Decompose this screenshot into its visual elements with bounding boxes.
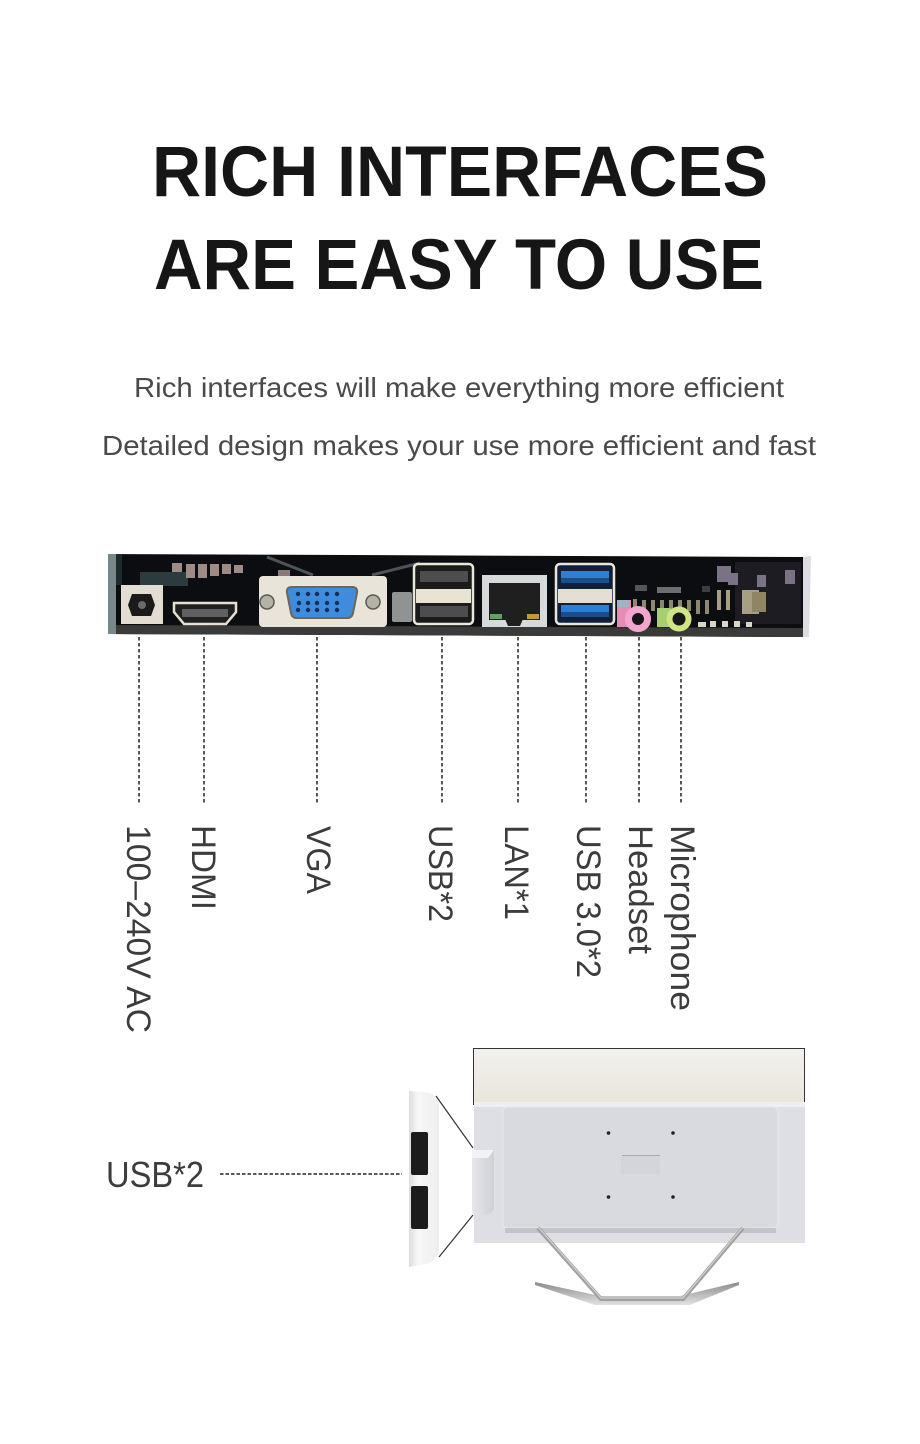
side USB leader line bbox=[220, 1173, 402, 1175]
vertical port labels bbox=[119, 825, 701, 1033]
side USB detail bbox=[409, 1091, 439, 1267]
icon: USB 2.0 ports bbox=[414, 564, 473, 624]
subtitle text bbox=[102, 372, 816, 461]
vertical port labels: VGA bbox=[299, 826, 337, 894]
capacitor bbox=[392, 592, 412, 622]
icon: LAN port bbox=[482, 575, 547, 627]
icon: pink headset jack bbox=[617, 600, 648, 628]
icon: USB 3.0 ports bbox=[556, 564, 614, 624]
monitor stand bbox=[535, 1227, 743, 1305]
subtitle text: Rich interfaces will make everything more efficient bbox=[134, 372, 784, 403]
side USB label: USB*2 bbox=[106, 1154, 204, 1195]
vertical port labels: USB 3.0*2 bbox=[569, 825, 607, 978]
monitor back view bbox=[472, 1048, 805, 1305]
icon: green microphone jack bbox=[657, 608, 688, 628]
circuit board details bbox=[140, 557, 801, 627]
callout lines bbox=[436, 1096, 473, 1257]
monitor side bump bbox=[472, 1150, 494, 1215]
title: ARE EASY TO USE bbox=[154, 226, 764, 305]
vertical port labels: Microphone bbox=[663, 825, 701, 1011]
icon: side USB port lower bbox=[411, 1186, 428, 1229]
vertical port labels: USB*2 bbox=[421, 825, 459, 922]
vertical port labels: LAN*1 bbox=[497, 825, 535, 920]
icon: power jack bbox=[121, 585, 163, 624]
vertical port labels: HDMI bbox=[184, 825, 222, 910]
icon: VGA port bbox=[259, 576, 387, 627]
title bbox=[152, 133, 768, 305]
vertical port labels: Headset bbox=[621, 825, 659, 955]
subtitle text: Detailed design makes your use more efficient and fast bbox=[102, 430, 816, 461]
dashed leader lines bbox=[139, 637, 681, 803]
title: RICH INTERFACES bbox=[152, 133, 768, 212]
panel: rear IO ports bbox=[108, 554, 811, 637]
icon: side USB port upper bbox=[411, 1132, 428, 1175]
vertical port labels: 100–240V AC bbox=[119, 825, 157, 1033]
icon: HDMI port bbox=[174, 603, 236, 624]
